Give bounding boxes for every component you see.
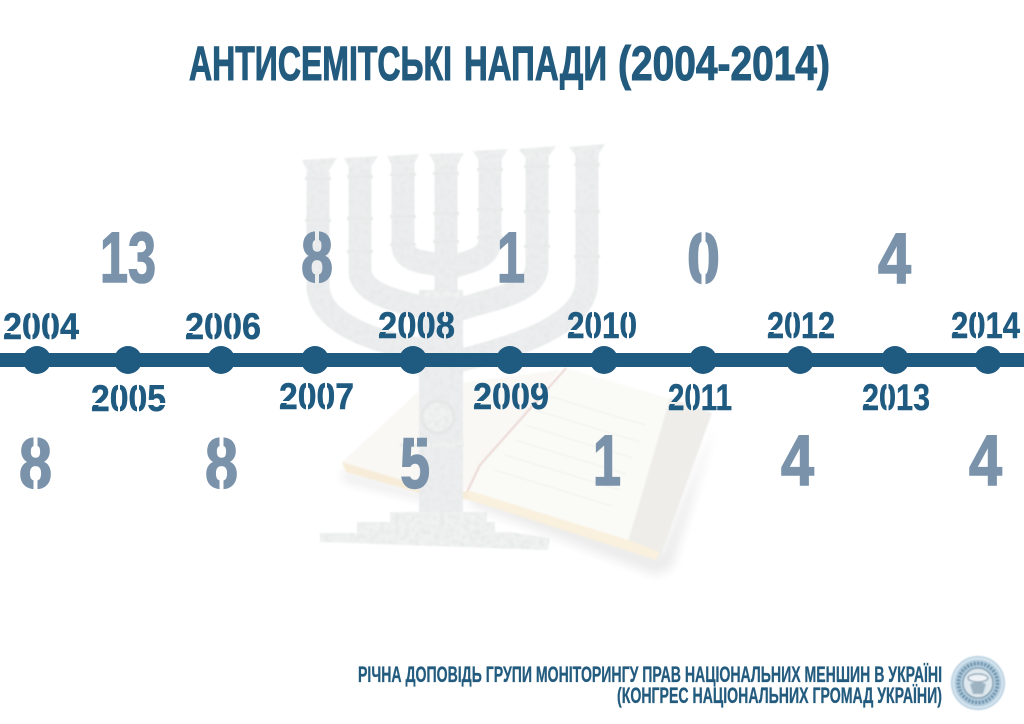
attack counts: 0 [687,220,720,299]
menorah stem collars [400,292,464,447]
attack counts: 8 [19,425,52,504]
attack counts: 8 [205,425,238,504]
text lines on page [495,395,645,506]
attack counts [19,219,1002,504]
attack counts: 13 [100,219,156,298]
menorah base [320,512,550,550]
attack counts: 1 [593,422,621,501]
year labels: 2013 [862,377,930,418]
right page [467,368,708,552]
title: (2004-2014) [618,38,830,91]
logo: national communities congress seal [951,656,1005,710]
year labels: 2005 [91,378,166,419]
timeline dots [23,346,1002,374]
year labels: 2011 [668,377,732,418]
year labels: 2009 [473,376,549,417]
page edges bottom [467,490,660,560]
book shadows [340,425,715,575]
attack counts: 5 [400,425,430,504]
background illustration: menorah [302,144,605,550]
right page gutter edge [467,368,566,492]
right page block [628,398,712,557]
menorah medallion [422,401,454,433]
left page edge [342,462,470,500]
attack counts: 4 [878,220,911,299]
menorah capitals [302,144,605,173]
menorah column rings [305,163,600,275]
title: АНТИСЕМІТСЬКІ [189,38,452,91]
year labels: 2010 [567,305,637,346]
attack counts: 4 [781,422,814,501]
footer source text [358,662,942,708]
year labels: 2012 [767,305,835,346]
background illustration: book [340,368,715,575]
year labels: 2007 [279,376,354,417]
menorah branches [318,152,587,362]
menorah stem [419,290,463,512]
attack counts: 8 [301,219,333,298]
title [189,38,830,91]
timeline [0,346,1024,374]
year labels: 2006 [185,306,261,347]
year labels [4,312,1020,412]
attack counts: 1 [497,219,525,298]
year labels: 2004 [3,306,79,347]
title: НАПАДИ [464,38,607,91]
timeline bar [0,353,1024,367]
left page [342,370,560,490]
year labels: 2008 [378,305,455,346]
attack counts: 4 [969,422,1002,501]
